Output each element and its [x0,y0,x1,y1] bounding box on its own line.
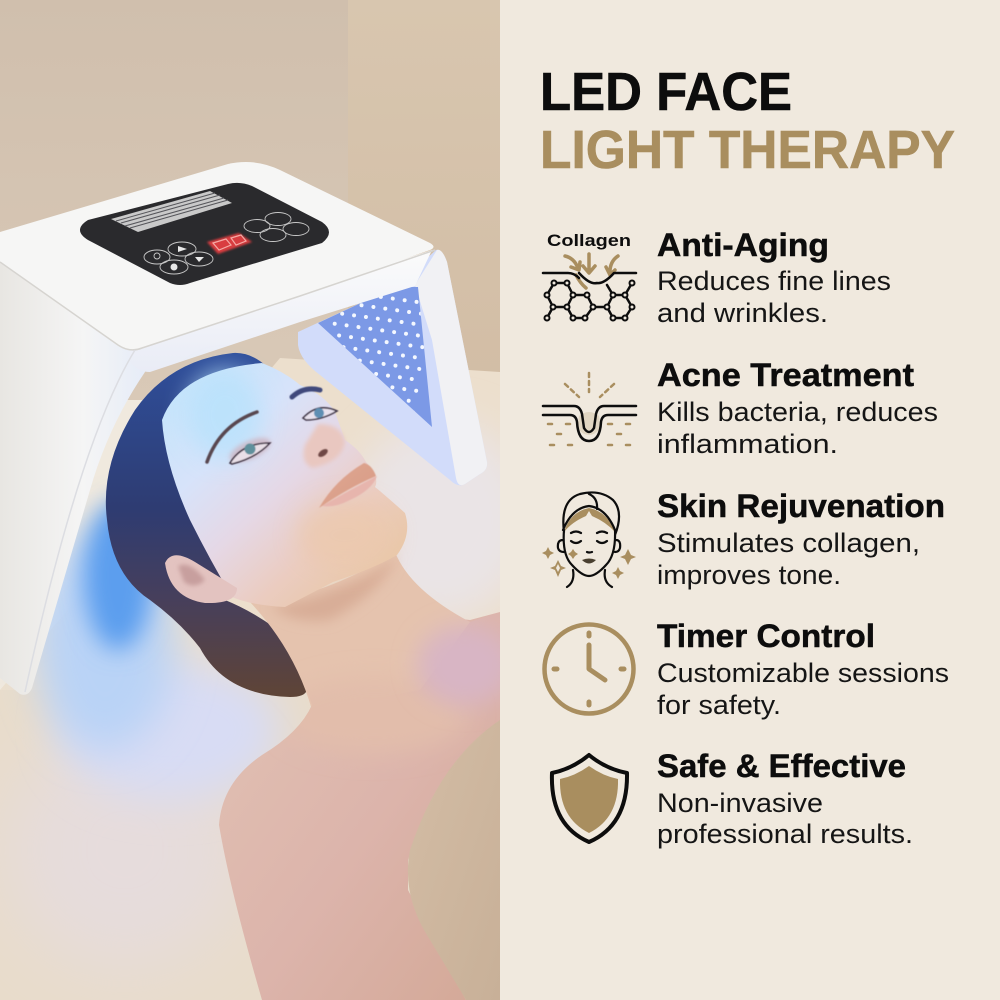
icon: shield [552,755,627,842]
text: skin rejuvenation: Stimulates collagen, [657,528,920,558]
LED device left leg [0,262,152,695]
treatment bed [0,358,530,1000]
neck to chest blend [301,622,500,732]
title: LED FACE [540,62,792,122]
control panel [80,183,329,285]
nose [304,424,345,468]
towel wrap [408,720,500,1000]
text: anti-aging: Anti-Aging [657,227,829,263]
icon: face rejuvenation [542,492,636,587]
text: anti-aging: and wrinkles. [657,298,828,328]
timer display [207,233,252,254]
wall [0,0,500,400]
jaw shadow [278,562,390,623]
text: timer control [657,618,949,720]
right eye and brow [292,389,337,420]
left eye and brow [207,412,274,467]
text: skin rejuvenation [657,488,945,590]
icon: collagen [543,231,636,320]
text: timer control: for safety. [657,690,781,720]
LED device top housing [0,162,435,692]
text: acne treatment: Acne Treatment [657,357,914,393]
cheek warmth [292,497,370,557]
neck [250,552,470,710]
icon: clock [544,624,634,714]
vent grille [111,191,232,232]
LED device right inner panel [298,250,487,485]
lips [319,463,377,508]
title [540,62,955,180]
hair [106,353,307,697]
control buttons [144,212,309,274]
text: timer control: Customizable sessions [657,658,949,688]
text: timer control: Timer Control [657,618,875,654]
text: safe and effective [657,748,913,849]
LED light dots [332,296,424,412]
icon: acne pore [543,373,636,445]
forehead glow [187,370,263,460]
text: skin rejuvenation: Skin Rejuvenation [657,488,945,524]
title: LIGHT THERAPY [540,120,955,180]
text: anti-aging [657,227,891,328]
text: acne treatment [657,357,938,459]
text: acne treatment: Kills bacteria, reduces [657,397,938,427]
shoulder and chest [219,600,500,1000]
text: safe and effective: professional results. [657,819,913,849]
text: acne treatment: inflammation. [657,429,838,459]
text: safe and effective: Non-invasive [657,788,823,818]
text: skin rejuvenation: improves tone. [657,560,841,590]
text: safe and effective: Safe & Effective [657,748,906,784]
front band of housing [130,250,432,372]
face [162,363,407,607]
ear [165,555,237,603]
text: anti-aging: Reduces fine lines [657,266,891,296]
icon: collagen: Collagen [547,231,631,250]
photo: woman under LED mask [0,0,530,1000]
